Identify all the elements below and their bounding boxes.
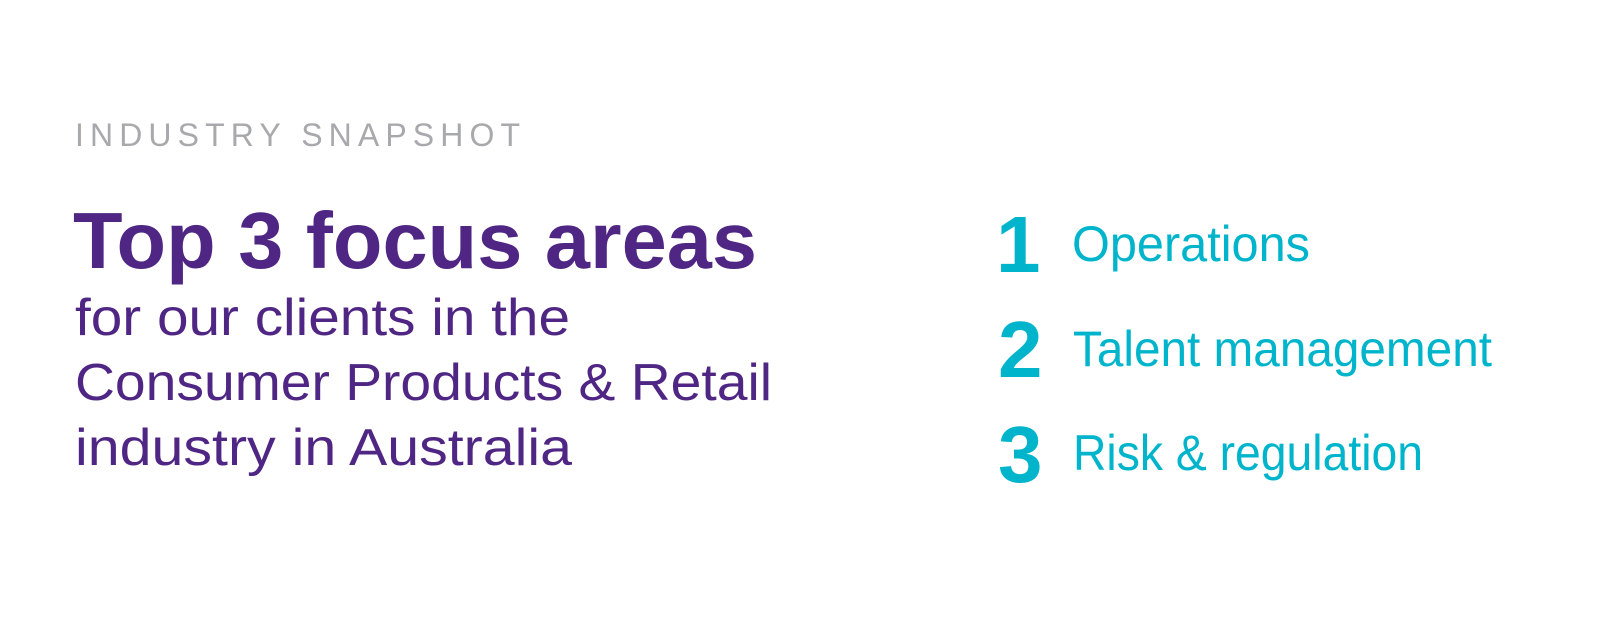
item 1 bbox=[996, 200, 1310, 289]
item 2 bbox=[998, 305, 1492, 394]
item 1: 1 bbox=[996, 200, 1040, 289]
item 3 bbox=[998, 410, 1423, 499]
item 2: 2 bbox=[998, 305, 1042, 394]
subtitle bbox=[75, 289, 772, 477]
item 3: 3 bbox=[998, 410, 1042, 499]
item 3: Risk & regulation bbox=[1073, 425, 1423, 481]
item 2: Talent management bbox=[1073, 321, 1492, 377]
subtitle: industry in Australia bbox=[75, 419, 572, 477]
subtitle: for our clients in the bbox=[75, 289, 570, 347]
list: focus areas bbox=[996, 200, 1492, 499]
subtitle: Consumer Products & Retail bbox=[75, 354, 772, 412]
item 1: Operations bbox=[1072, 216, 1310, 272]
eyebrow label: INDUSTRY SNAPSHOT bbox=[75, 117, 520, 153]
title: Top 3 focus areas bbox=[73, 196, 757, 285]
